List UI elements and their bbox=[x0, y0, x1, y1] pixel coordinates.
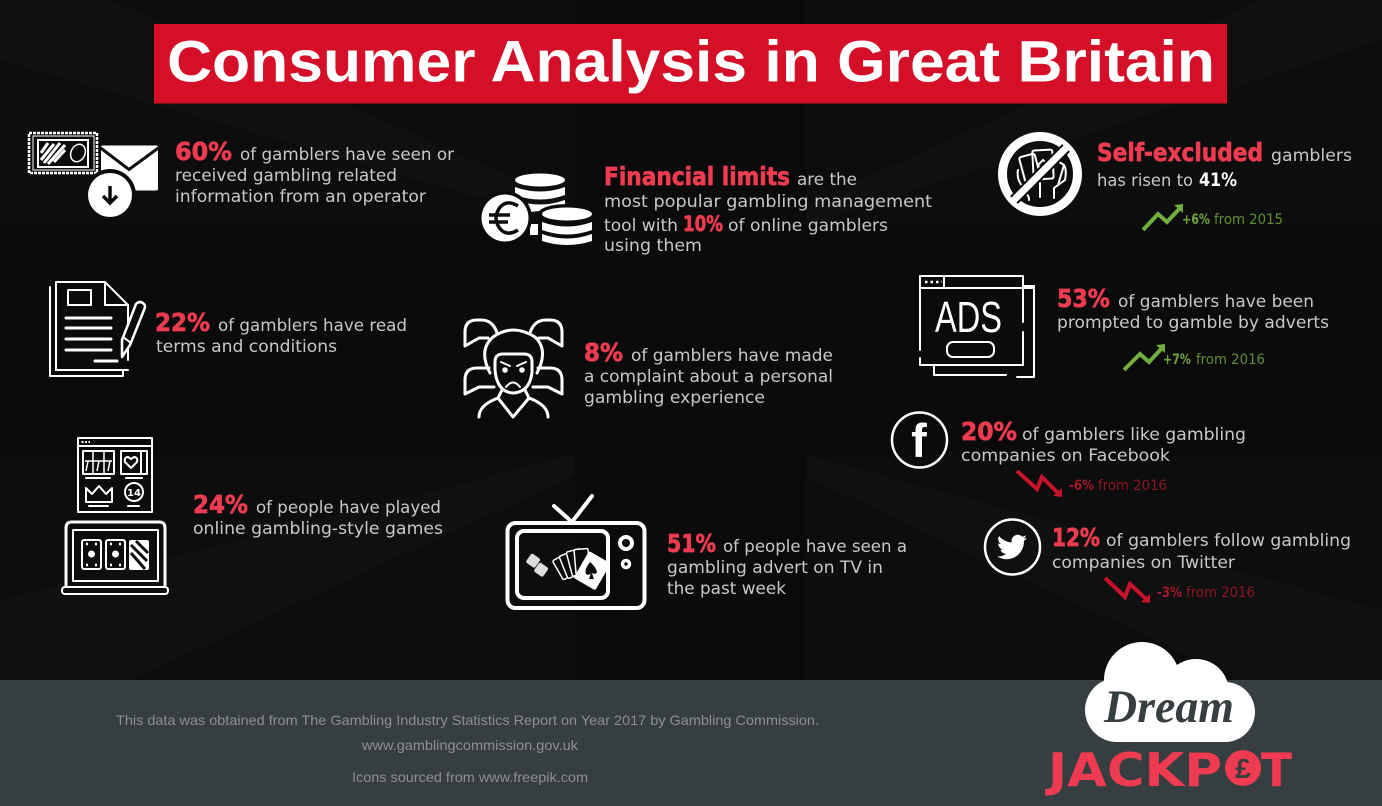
panel: facebook stat bbox=[892, 412, 1246, 497]
text block: 22% bbox=[155, 308, 407, 356]
icon: prohibited cards bbox=[1002, 136, 1078, 212]
icon: television with dice and cards bbox=[508, 496, 644, 608]
panel: terms and conditions stat bbox=[50, 282, 407, 376]
icon: red down arrow bbox=[1017, 471, 1062, 497]
icon: facebook bbox=[892, 412, 947, 468]
panel: financial limits stat bbox=[478, 162, 933, 255]
text block: 24% bbox=[193, 490, 443, 538]
text block: financial limits: most popular gambling management bbox=[604, 192, 933, 211]
text block: 12%: of gamblers follow gambling bbox=[1106, 531, 1351, 550]
text block: 8%: a complaint about a personal bbox=[584, 367, 833, 386]
text block: 24%: online gambling-style games bbox=[193, 519, 443, 538]
panel: gambling-style games stat bbox=[62, 438, 443, 594]
trend label: -3% from 2016: -3% bbox=[1157, 585, 1182, 601]
text block: 12%: 12% bbox=[1052, 523, 1100, 552]
text block: 51%: gambling advert on TV in bbox=[667, 558, 883, 577]
text block: 8%: of gamblers have made bbox=[631, 346, 833, 365]
trend label: -3% from 2016 bbox=[1157, 585, 1255, 601]
text block: 22%: of gamblers have read bbox=[218, 316, 407, 335]
logo: Dream Jackpot: JACKP bbox=[1045, 743, 1222, 797]
text block: 51%: the past week bbox=[667, 579, 786, 598]
trend label: +6% from 2015: from 2015 bbox=[1214, 212, 1283, 228]
icon: ads browser window: ADS bbox=[935, 293, 1002, 342]
source note bbox=[116, 712, 819, 785]
panel: twitter stat bbox=[985, 520, 1351, 603]
text block: self-excluded: Self-excluded bbox=[1097, 138, 1263, 167]
trend label: -3% from 2016: from 2016 bbox=[1186, 585, 1255, 601]
text block: 51% bbox=[667, 529, 907, 598]
text block: self-excluded: gamblers bbox=[1271, 146, 1352, 165]
icon: angry person with speech bubbles bbox=[465, 320, 562, 417]
trend label: +7% from 2016: +7% bbox=[1163, 352, 1191, 368]
text block: 53% bbox=[1057, 284, 1329, 332]
logo: Dream Jackpot: Dream bbox=[1103, 681, 1234, 733]
icon: euro coin and coin stacks bbox=[478, 174, 596, 247]
logo: Dream Jackpot: £ bbox=[1235, 753, 1251, 784]
icon: twitter bbox=[985, 520, 1040, 574]
text block: 20%: of gamblers like gambling bbox=[1022, 425, 1246, 444]
text block: 8%: 8% bbox=[584, 338, 623, 367]
text block: self-excluded: 41% bbox=[1199, 169, 1237, 191]
text block: 53%: of gamblers have been bbox=[1118, 292, 1314, 311]
text block: 20% bbox=[961, 417, 1246, 465]
text block: financial limits: using them bbox=[604, 236, 702, 255]
icon: red down arrow bbox=[1105, 578, 1150, 603]
footer panel bbox=[0, 680, 1382, 806]
trend label: -6% from 2016: from 2016 bbox=[1098, 478, 1167, 494]
text block: 12% bbox=[1052, 523, 1351, 572]
source note: This data was obtained from The Gambling Industry Statistics Report on Year 2017 by Gambling Commission. bbox=[116, 712, 819, 728]
text block: 24%: 24% bbox=[193, 490, 248, 519]
text block: 60%: 60% bbox=[175, 137, 232, 166]
trend label: +7% from 2016: from 2016 bbox=[1196, 352, 1265, 368]
icon: green up arrow bbox=[1143, 204, 1183, 230]
text block: self-excluded: has risen to bbox=[1097, 171, 1193, 190]
text block: 60% bbox=[175, 137, 454, 206]
text block: financial limits: tool with bbox=[604, 216, 678, 235]
trend label: +6% from 2015 bbox=[1182, 212, 1283, 228]
source note: Icons sourced from www.freepik.com bbox=[352, 769, 588, 785]
panel: TV advert stat bbox=[508, 496, 907, 608]
panel: self-excluded stat bbox=[1002, 136, 1352, 230]
text block: financial limits: Financial limits bbox=[604, 162, 790, 191]
icon: slot window and laptop: 14 bbox=[127, 488, 141, 499]
icon: green up arrow bbox=[1124, 344, 1165, 370]
logo: Dream Jackpot bbox=[1045, 642, 1293, 797]
text block: 12%: companies on Twitter bbox=[1052, 553, 1235, 572]
icon: ads browser window bbox=[920, 276, 1034, 377]
trend label: -6% from 2016 bbox=[1069, 478, 1167, 494]
text block: 8% bbox=[584, 338, 833, 407]
source note: www.gamblingcommission.gov.uk bbox=[361, 737, 579, 753]
trend label: +6% from 2015: +6% bbox=[1182, 212, 1210, 228]
text block: 53%: prompted to gamble by adverts bbox=[1057, 313, 1329, 332]
text block: 51%: of people have seen a bbox=[723, 537, 907, 556]
text block: self-excluded bbox=[1097, 138, 1352, 191]
text block: 22%: terms and conditions bbox=[156, 337, 337, 356]
text block: 51%: 51% bbox=[667, 529, 716, 558]
trend label: -6% from 2016: -6% bbox=[1069, 478, 1094, 494]
icon: slot window and laptop bbox=[62, 438, 168, 594]
icon: document and pen bbox=[50, 282, 145, 376]
text block: 24%: of people have played bbox=[256, 498, 441, 517]
text block: financial limits: of online gamblers bbox=[728, 216, 888, 235]
text block: financial limits: are the bbox=[797, 170, 857, 189]
icon: facebook: f bbox=[911, 414, 927, 467]
icon: ticket and envelope bbox=[29, 133, 159, 221]
text block: 60%: information from an operator bbox=[175, 187, 426, 206]
panel: operator information stat bbox=[29, 133, 454, 221]
trend label: +7% from 2016 bbox=[1163, 352, 1265, 368]
title: Consumer Analysis in Great Britain bbox=[167, 30, 1215, 94]
text block: 22%: 22% bbox=[155, 308, 210, 337]
panel: adverts stat bbox=[920, 276, 1329, 377]
panel: complaints stat bbox=[465, 320, 833, 417]
text block: 53%: 53% bbox=[1057, 284, 1110, 313]
text block: financial limits: 10% bbox=[683, 212, 723, 236]
text block: 20%: 20% bbox=[961, 417, 1017, 446]
text block: 60%: of gamblers have seen or bbox=[240, 145, 454, 164]
text block: 20%: companies on Facebook bbox=[961, 446, 1170, 465]
logo: Dream Jackpot: T bbox=[1261, 743, 1293, 797]
text block: 8%: gambling experience bbox=[584, 388, 765, 407]
text block: financial limits bbox=[604, 162, 933, 255]
text block: 60%: received gambling related bbox=[175, 166, 397, 185]
